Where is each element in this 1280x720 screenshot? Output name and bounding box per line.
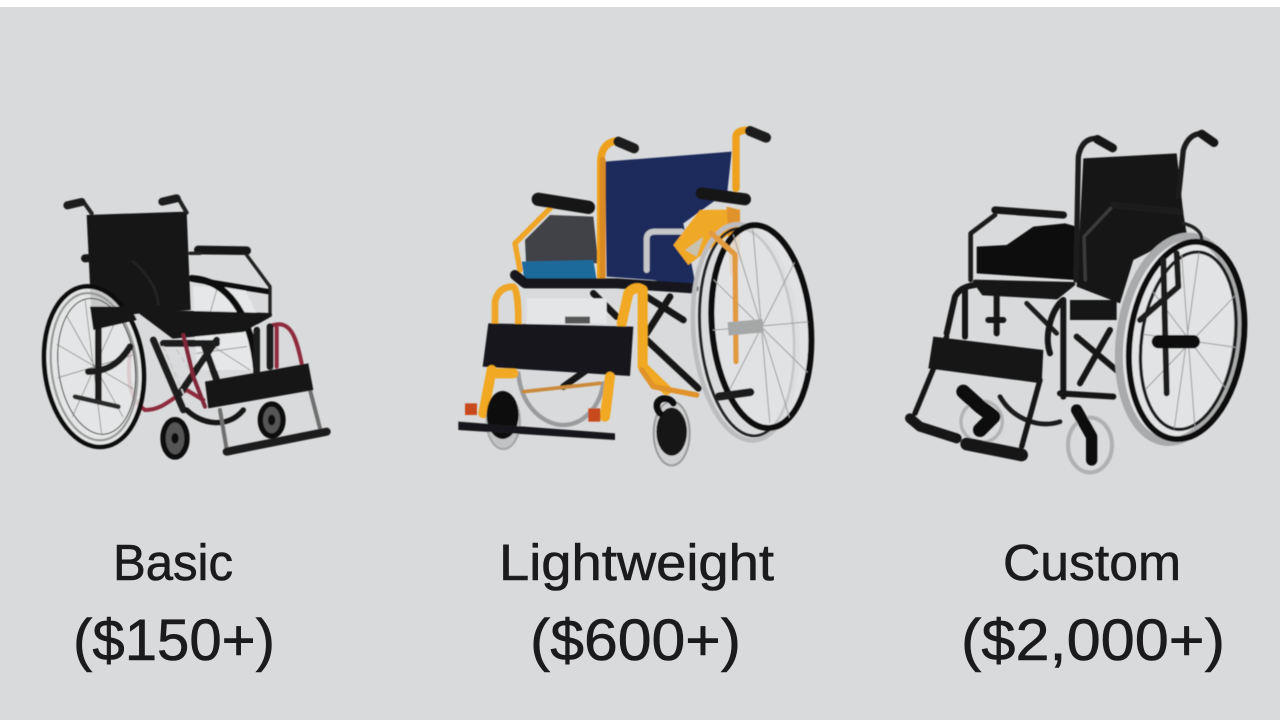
caster wheels, lightweight xyxy=(487,391,690,465)
label: custom tier xyxy=(961,534,1225,673)
heading: Basic: Basic xyxy=(113,534,233,591)
price: $600+: ($600+) xyxy=(530,608,741,673)
caster wheels, custom xyxy=(961,392,1112,472)
price: $150+: ($150+) xyxy=(73,608,275,673)
rear wheel, basic xyxy=(35,281,153,453)
panel: basic wheelchair illustration xyxy=(35,198,327,457)
price: $2,000+: ($2,000+) xyxy=(961,608,1225,673)
panel: custom wheelchair illustration xyxy=(910,133,1257,472)
label: lightweight tier xyxy=(499,534,774,673)
label: basic tier xyxy=(73,534,275,673)
heading: Custom: Custom xyxy=(1003,534,1181,591)
caster wheels, basic xyxy=(163,404,283,457)
rear wheel, lightweight xyxy=(684,219,820,445)
heading: Lightweight: Lightweight xyxy=(499,534,774,591)
rear wheel, custom xyxy=(1106,229,1257,451)
panel: lightweight wheelchair illustration xyxy=(458,130,820,465)
